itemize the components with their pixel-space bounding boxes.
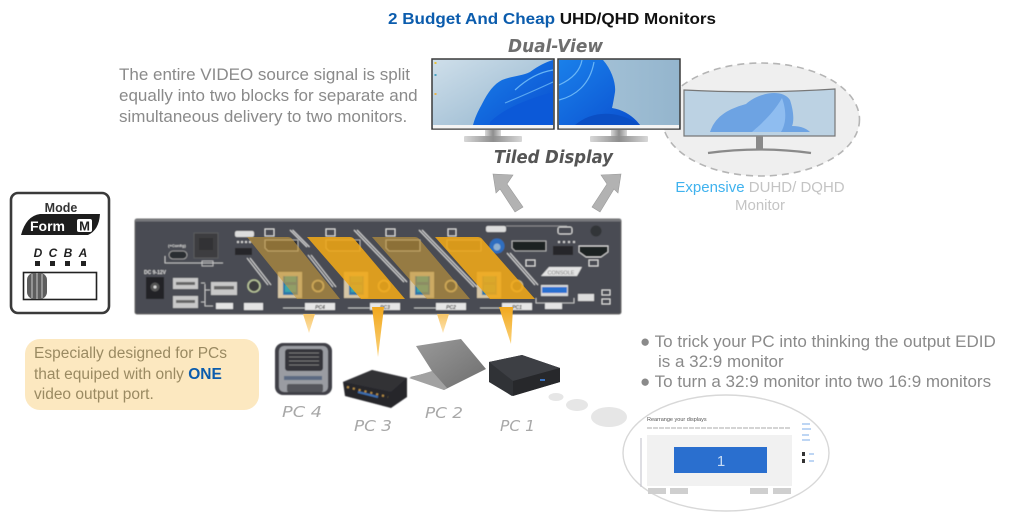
audio jack [248, 280, 260, 292]
PC 2 laptop [409, 339, 486, 390]
PC 3 device [343, 370, 407, 408]
KVM rear panel: PC2 [446, 305, 456, 311]
mode switch panel: M [79, 218, 90, 234]
KVM rear panel: PC1 [512, 305, 522, 311]
right monitor [558, 59, 680, 142]
KVM rear panel: PC3 [380, 305, 390, 311]
description text: equally into two blocks for separate and [119, 86, 418, 105]
heading: Dual-View: Dual-View [508, 37, 604, 57]
audio jacks [312, 280, 522, 292]
KVM rear panel [135, 219, 621, 314]
PC 1 label: PC 1 [500, 417, 535, 435]
blue USB port [541, 285, 568, 296]
thought bubbles [548, 393, 627, 427]
mode switch panel [11, 193, 109, 313]
ultrawide monitor bubble [662, 63, 860, 176]
mode switch panel: C [49, 246, 58, 260]
callout: one video port: video output port. [34, 386, 154, 403]
title: 2 Budget And Cheap UHD/QHD Monitors [388, 11, 716, 28]
USB-B ports [278, 272, 501, 298]
arrow: right up [592, 174, 621, 212]
KVM rear panel: DC 9-12V [144, 270, 167, 276]
divider lines [247, 230, 538, 287]
description text: simultaneous delivery to two monitors. [119, 107, 407, 126]
mode switch panel: Mode [45, 201, 77, 215]
bullet list: is a 32:9 monitor [658, 352, 784, 371]
KVM rear panel: CONSOLE [548, 270, 575, 276]
USB-A ports [173, 278, 198, 289]
console badge [541, 267, 582, 276]
DP ports [265, 240, 481, 251]
mode switch panel: D [34, 246, 43, 260]
yellow overlay PC 1 [435, 237, 535, 344]
bullet list: ● To turn a 32:9 monitor into two 16:9 monitors [640, 372, 991, 391]
heading: Tiled Display: Tiled Display [494, 148, 614, 168]
caption: expensive monitor: Monitor [735, 197, 785, 214]
DC jack [146, 277, 164, 299]
KVM rear panel: (+Config) [168, 243, 186, 248]
display settings bubble [623, 395, 829, 511]
RJ45 port [194, 233, 218, 258]
PC 1 device [489, 355, 560, 396]
display settings bubble: Rearrange your displays [647, 417, 707, 423]
callout: one video port [25, 339, 259, 410]
PC 4 device [275, 343, 332, 395]
description text: The entire VIDEO source signal is split [119, 65, 410, 84]
PC 2 label: PC 2 [425, 404, 463, 422]
callout: one video port: that equiped with only ONE [34, 366, 222, 383]
yellow overlay PC 4 [247, 237, 340, 333]
form dial [490, 238, 504, 254]
callout: one video port: Especially designed for PCs [34, 345, 227, 362]
mode switch panel: Form [30, 218, 65, 234]
PC 4 label: PC 4 [282, 403, 322, 421]
KVM rear panel: PC4 [315, 305, 325, 311]
caption: expensive monitor: Expensive DUHD/ DQHD [675, 179, 845, 196]
PC 3 label: PC 3 [354, 417, 392, 435]
arrow: left up [493, 174, 523, 212]
yellow overlay PC 2 [372, 237, 470, 333]
port number labels [265, 229, 274, 236]
USB-C port [169, 251, 187, 259]
mode label and switch [235, 231, 254, 237]
PC labels [305, 303, 532, 310]
bullet list: ● To trick your PC into thinking the output EDID [640, 332, 996, 351]
display settings bubble: 1 [717, 453, 725, 470]
mode switch panel: B [64, 246, 73, 260]
mode switch panel: A [78, 246, 87, 260]
left monitor [432, 59, 554, 142]
yellow overlay PC 3 [307, 237, 405, 357]
console switch and HDMI [558, 241, 575, 243]
